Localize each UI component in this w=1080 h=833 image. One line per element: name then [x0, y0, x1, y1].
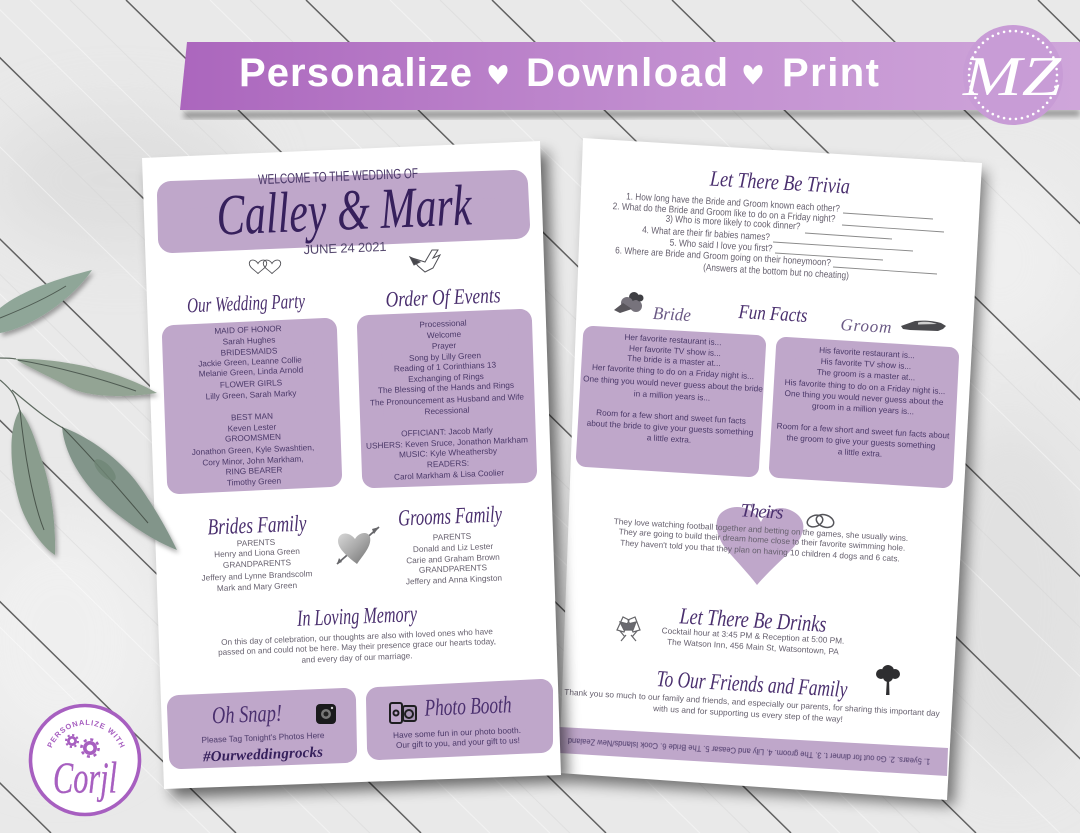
heading: oh snap: Oh Snap!: [212, 701, 282, 729]
brides family names: [201, 538, 313, 593]
event list: MUSIC: Kyle Wheathersby: [399, 447, 498, 459]
banner slogan: [239, 51, 879, 95]
grooms family names: Carie and Graham Brown: [406, 553, 500, 565]
hashtag: #Ourweddingrocks: [202, 745, 323, 765]
groom facts text: Room for a few short and sweet fun facts about: [776, 422, 950, 440]
badge wordmark: Corjl: [53, 754, 117, 802]
bride facts text: Her favorite restaurant is...: [624, 333, 722, 347]
drinks details: The Watson Inn, 456 Main St, Watsontown, PA: [667, 638, 840, 656]
banner slogan: Personalize: [239, 51, 472, 95]
couple names: Calley & Mark: [215, 172, 474, 248]
answer bar: [559, 727, 948, 776]
icon: gears: [66, 735, 99, 757]
banner slogan: Download: [526, 51, 728, 95]
event list: Processional: [419, 319, 467, 329]
badge: personalize with Corjl: [28, 704, 142, 816]
wedding party names: GROOMSMEN: [225, 432, 281, 444]
panel: right program card: [559, 138, 982, 800]
panel: photo booth: [378, 691, 541, 750]
heading: friends and family: To Our Friends and Family: [656, 666, 849, 702]
left card shadow: [150, 152, 568, 798]
event list: USHERS: Keven Sruce, Jonathon Markham: [366, 435, 528, 451]
panel: order of events: [366, 319, 528, 482]
MZ logo seal: [962, 25, 1063, 125]
icon: bouquet: [614, 292, 644, 313]
panel: bride facts: [583, 333, 764, 467]
wedding party names: Keven Lester: [228, 423, 277, 433]
heading: groom: Groom: [840, 315, 892, 337]
grooms family names: Donald and Liz Lester: [413, 542, 494, 554]
MZ logo seal: MZ: [962, 46, 1062, 108]
bride facts text: in a million years is...: [634, 389, 710, 403]
event list: Reading of 1 Corinthians 13: [394, 360, 497, 374]
photo tag prompt: Please Tag Tonight's Photos Here: [201, 731, 325, 745]
brides family names: Henry and Liona Green: [214, 547, 300, 559]
icon: phone and camera: [390, 703, 416, 723]
leaf 4: [62, 427, 177, 550]
icon: linked hearts: [249, 260, 281, 274]
grooms family names: GRANDPARENTS: [419, 563, 488, 575]
icon: tree: [876, 665, 900, 695]
photo booth text: [393, 726, 521, 750]
wedding party names: Lilly Green, Sarah Marky: [205, 389, 297, 401]
drinks details: [661, 626, 845, 656]
groom facts text: His favorite thing to do on a Friday night is...: [784, 378, 946, 396]
theirs text: They haven't told you that they plan on having 10 children 4 dogs and 6 cats.: [620, 538, 900, 564]
trivia answer rules: [773, 213, 944, 274]
wedding party names: MAID OF HONOR: [214, 324, 282, 336]
banner slogan: Print: [782, 51, 879, 95]
wedding party names: Timothy Green: [227, 476, 282, 488]
panel: left program card: [142, 141, 561, 789]
event list: READERS:: [427, 459, 469, 469]
heading: in loving memory: In Loving Memory: [296, 601, 418, 631]
event list: Exchanging of Rings: [408, 372, 484, 384]
memory paragraph: [218, 627, 496, 665]
bride facts text: a little extra.: [647, 433, 691, 445]
theirs text: They love watching football together and betting on the games, she usually wins.: [613, 517, 909, 543]
photo booth text: Our gift to you, and your gift to us!: [396, 736, 520, 750]
event list: Prayer: [432, 341, 457, 351]
memory paragraph: passed on and could not be here. May their presence grace our hearts today,: [218, 637, 496, 657]
photo booth text: Have some fun in our photo booth.: [393, 726, 521, 740]
trivia questions: (Answers at the bottom but no cheating): [703, 262, 849, 282]
event list: Recessional: [424, 406, 470, 416]
wedding party names: Melanie Green, Linda Arnold: [199, 365, 304, 379]
heading: photo booth: Photo Booth: [423, 692, 512, 722]
wedding party names: Sarah Hughes: [222, 335, 276, 347]
theirs text: They are going to build their dream home close to their favorite swimming hole.: [618, 527, 906, 553]
header band: [171, 184, 516, 239]
trivia questions: 3) Who is more likely to cook dinner?: [665, 214, 801, 232]
icon: purple heart: [717, 507, 803, 585]
leaf 2: [15, 359, 157, 396]
bride facts text: The bride is a master at...: [627, 354, 721, 368]
grooms family names: Jeffery and Anna Kingston: [406, 574, 503, 586]
groom facts text: His favorite TV show is...: [820, 357, 912, 371]
decorative eucalyptus leaves: [0, 270, 177, 555]
theirs text: [613, 517, 909, 564]
wedding party names: BEST MAN: [231, 412, 273, 422]
leaf 1: [0, 270, 92, 333]
wedding date: JUNE 24 2021: [303, 239, 387, 257]
wedding party names: BRIDESMAIDS: [220, 346, 278, 358]
grooms family names: [406, 532, 503, 586]
heading: brides family: Brides Family: [207, 511, 308, 539]
bride facts text: Room for a few short and sweet fun facts: [596, 408, 746, 426]
badge arc text: PERSONALIZE WITH: [47, 720, 125, 748]
heading: order of events: Order Of Events: [385, 282, 501, 312]
wedding party names: [192, 324, 314, 488]
icon: banner hearts: [488, 65, 763, 84]
icon: instagram: [316, 704, 336, 724]
icon: dove: [410, 250, 440, 272]
brides family names: GRANDPARENTS: [223, 558, 292, 570]
groom facts text: a little extra.: [838, 447, 882, 459]
bride facts text: One thing you would never guess about the bride: [583, 374, 764, 394]
wedding party names: Cory Minor, John Markham,: [202, 454, 304, 468]
top banner shadow: [184, 110, 1080, 118]
event list: Carol Markham & Lisa Coolier: [394, 468, 504, 482]
event list: Song by Lilly Green: [409, 351, 482, 363]
icon: heart with arrow: [337, 527, 379, 564]
brides family names: PARENTS: [237, 538, 276, 548]
event list: OFFICIANT: Jacob Marly: [401, 426, 494, 438]
groom facts text: One thing you would never guess about the: [784, 389, 944, 407]
trivia questions: 4. What are their fir babies names?: [642, 225, 770, 243]
memory paragraph: On this day of celebration, our thoughts are also with loved ones who have: [221, 627, 493, 647]
groom facts text: the groom to give your guests something: [786, 433, 936, 451]
heading: bride: Bride: [652, 303, 692, 325]
trivia questions: 5. Who said I love you first?: [669, 238, 773, 254]
heading: trivia: Let There Be Trivia: [709, 165, 851, 199]
event list: [366, 319, 528, 482]
wedding party names: Jackie Green, Leanne Collie: [198, 355, 302, 369]
icon: champagne flutes: [617, 617, 640, 641]
brides family names: Jeffery and Lynne Brandscolm: [201, 569, 313, 583]
thank you text: Thank you so much to our family and friends, and especially our parents, for sharing this important day: [564, 688, 941, 718]
icon: wedding rings: [806, 512, 836, 530]
trivia questions: [612, 191, 849, 282]
event list: Welcome: [427, 330, 462, 340]
heading: drinks: Let There Be Drinks: [678, 603, 827, 637]
heading: fun facts: Fun Facts: [737, 301, 808, 327]
icon: vintage car: [901, 321, 946, 331]
bride facts text: [583, 333, 764, 445]
groom facts text: His favorite restaurant is...: [819, 346, 915, 360]
banner: Personalize Download Print: [180, 42, 1080, 110]
wedding party names: FLOWER GIRLS: [220, 378, 283, 390]
bride facts text: about the bride to give your guests something: [586, 419, 754, 437]
heading: theirs: Theirs: [740, 500, 784, 524]
trivia questions: 2. What do the Bride and Groom like to do on a Friday night?: [612, 201, 836, 225]
panel: oh snap: [179, 700, 345, 765]
right card shadow: [566, 146, 986, 806]
trivia questions: 6. Where are Bride and Groom going on their honeymoon?: [615, 245, 831, 269]
bride facts text: Her favorite thing to do on a Friday night is...: [592, 363, 754, 381]
wedding party names: Jonathon Green, Kyle Swashtien,: [192, 443, 314, 457]
drinks details: Cocktail hour at 3:45 PM & Reception at 5:00 PM.: [661, 626, 845, 646]
thank you text: with us and for supporting us every step of the way!: [652, 704, 843, 724]
brides family names: Mark and Mary Green: [217, 581, 298, 593]
groom facts text: The groom is a master at...: [817, 368, 915, 382]
memory paragraph: and every day of our marriage.: [301, 651, 413, 665]
groom facts text: [776, 346, 950, 459]
event list: The Blessing of the Hands and Rings: [378, 381, 514, 395]
leaf 3: [11, 410, 55, 555]
event list: The Pronouncement as Husband and Wife: [370, 392, 525, 408]
wedding party names: RING BEARER: [225, 465, 283, 477]
panel: wedding party: [174, 324, 330, 488]
heading: grooms family: Grooms Family: [398, 501, 503, 531]
heading: wedding party: Our Wedding Party: [187, 289, 306, 317]
grooms family names: PARENTS: [433, 532, 472, 542]
trivia questions: 1. How long have the Bride and Groom known each other?: [626, 191, 840, 215]
bride facts text: Her favorite TV show is...: [629, 344, 721, 358]
welcome line: WELCOME TO THE WEDDING OF: [258, 165, 418, 187]
panel: groom facts: [776, 346, 950, 478]
groom facts text: groom in a million years is...: [812, 402, 914, 416]
upside-down trivia answers: 1. 5years. 2. Go out for dinner t. 3. The groom. 4. Lily and Ceasar 5. The Bride 6. Cook Islands/New Zealand: [568, 736, 930, 766]
